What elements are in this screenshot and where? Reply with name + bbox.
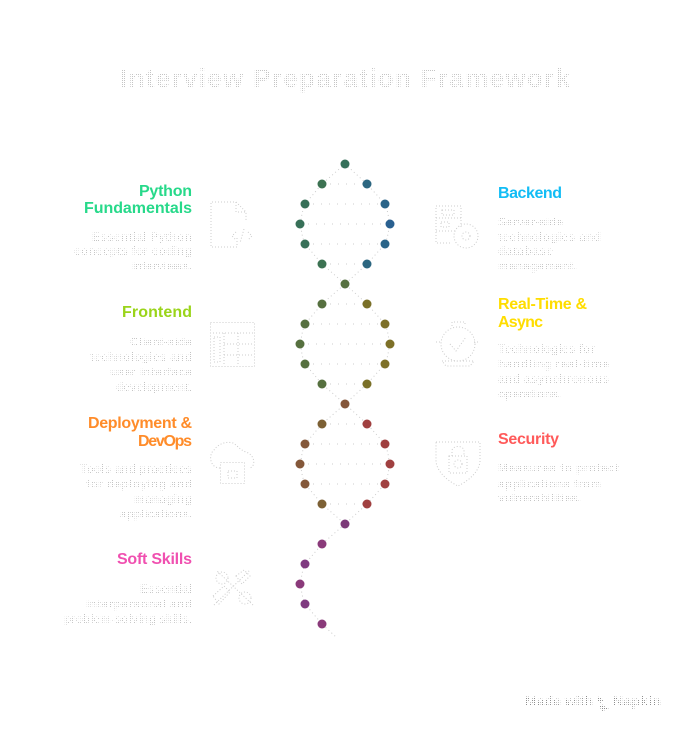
helix rungs [300,184,390,504]
description: Technologies for [498,342,595,356]
description [64,582,192,626]
description: applications. [120,507,192,521]
icon: server with gear [436,206,478,248]
description: development. [116,380,192,394]
description: for deploying and [86,477,192,491]
heading: Async [498,314,543,331]
description: technologies and [498,230,601,244]
description: Measures to protect [498,461,619,475]
panel: Deployment & DevOps [80,415,254,521]
description: management. [498,259,577,273]
description: Essential Python [92,230,192,244]
heading: Deployment & [88,415,192,432]
footer: Made with Napkin: Made with [525,693,593,709]
description: applications from [498,477,601,491]
description: vulnerabilities. [498,491,581,505]
icon: crossed tools [213,570,253,605]
description: handling real-time [498,357,609,371]
description: database [498,244,553,258]
description: problem-solving skills. [64,612,192,626]
heading: Python [139,183,192,200]
description [90,335,192,394]
footer: Made with Napkin [526,696,660,711]
description: Client-side [130,335,192,349]
heading: Frontend [122,304,192,321]
DNA helix diagram [296,160,394,637]
panel: Soft Skills [64,551,253,626]
heading: Soft Skills [117,551,192,568]
icon: page layout [210,322,254,366]
description: technologies and [90,350,192,364]
description [80,462,192,521]
panel: Backend [436,185,601,273]
icon: cloud with box [211,442,254,484]
description: managing [134,492,192,506]
panel: Python Fundamentals [74,183,252,273]
helix strands [301,164,389,637]
heading: Real-Time & [498,296,587,313]
heading: DevOps [138,433,192,450]
description: interviews. [132,259,192,273]
heading: Backend [498,185,562,202]
panel: Real-Time & Async [436,296,609,401]
description: Tools and practices [80,462,192,476]
description [74,232,191,269]
description [498,215,601,273]
description [498,342,609,401]
title: Interview Preparation Framework [120,63,571,93]
helix nodes [296,160,394,628]
heading: Fundamentals [84,200,192,217]
heading: Security [498,431,559,448]
description: Essential [140,582,192,596]
description: Server-side [498,215,563,229]
panel: Frontend [90,304,254,394]
description: concepts for coding [74,244,192,258]
description: and asynchronous [498,372,609,386]
heading [88,415,192,450]
description: operations. [498,387,561,401]
icon: shield with lock [436,442,480,486]
panel: Security [436,431,619,505]
footer: Made with Napkin: Napkin [613,693,661,709]
description: user interface [110,365,192,379]
icon: code document [211,202,252,247]
heading [498,296,587,331]
heading [84,183,192,217]
icon: clock with check [436,322,480,366]
description: interpersonal and [86,597,192,611]
description [498,464,619,501]
